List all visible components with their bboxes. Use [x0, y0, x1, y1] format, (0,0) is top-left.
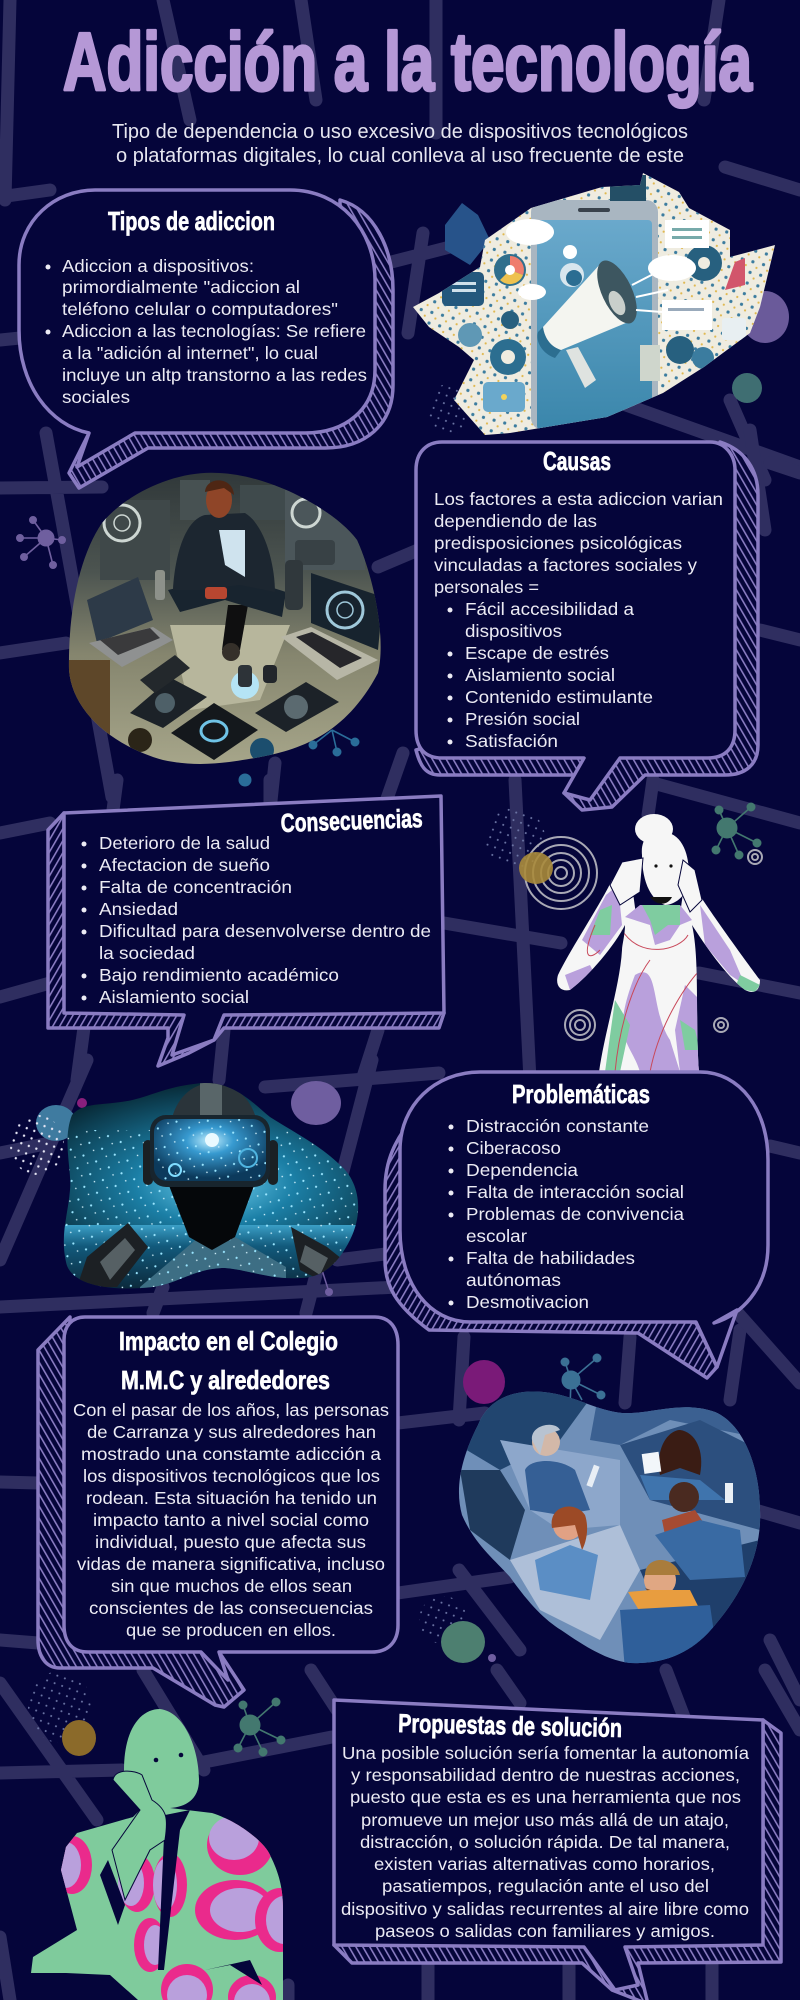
bullet list: teléfono celular o computadores" [62, 299, 338, 319]
hands [610, 858, 702, 912]
heading: Impacto en el Colegio [119, 1326, 338, 1356]
panel: problematicas [385, 1072, 768, 1378]
text and bullet list: Satisfación [465, 731, 558, 751]
bullet list: a la "adición al internet", lo cual [62, 343, 318, 363]
text and bullet list: dispositivos [465, 621, 562, 641]
text and bullet list: personales = [434, 577, 539, 597]
decor: purple and teal circles [428, 203, 789, 436]
subtitle: Tipo de dependencia o uso excesivo de dispositivos tecnológicos [112, 121, 688, 143]
subtitle [112, 121, 688, 167]
text and bullet list: Escape de estrés [465, 643, 609, 663]
megaphone [537, 255, 668, 388]
text and bullet list: Los factores a esta adiccion varian [434, 489, 723, 509]
bullet list [448, 1116, 684, 1312]
text and bullet list [434, 489, 723, 751]
man [168, 480, 286, 661]
elderly woman [532, 1432, 560, 1456]
text and bullet list: dependiendo de las [434, 511, 597, 531]
bubble shape [48, 796, 444, 1066]
body text: de Carranza y sus alrededores han [87, 1422, 376, 1442]
bubble shape [334, 1700, 781, 2000]
goggles [150, 1115, 270, 1187]
illustration: stressed woman [557, 814, 760, 1072]
heading: Tipos de adiccion [108, 206, 275, 236]
body text [73, 1400, 389, 1640]
helmet [173, 1085, 255, 1115]
text and bullet list: Contenido estimulante [465, 687, 653, 707]
woman resting [553, 1525, 578, 1540]
text and bullet list: predisposiciones psicológicas [434, 533, 682, 553]
bullet list: incluye un altp transtorno a las redes [62, 365, 367, 385]
icon: network node blue [239, 730, 359, 786]
bullet list: Dependencia [466, 1160, 578, 1180]
bullet list: Adiccion a las tecnologías: Se refiere [62, 321, 366, 341]
body text: promueve un mejor uso más allá de un atajo, [361, 1810, 729, 1830]
bubble shape [38, 1317, 398, 1707]
bullet list: Bajo rendimiento académico [99, 965, 339, 985]
icons [494, 254, 526, 286]
icon: network node green [712, 803, 761, 859]
bubble shape [416, 442, 758, 810]
bullet list: Deterioro de la salud [99, 833, 270, 853]
text and bullet list: Presión social [465, 709, 580, 729]
body text: Con el pasar de los años, las personas [73, 1400, 389, 1420]
bullet list: escolar [466, 1226, 527, 1246]
heading: Problemáticas [512, 1079, 650, 1109]
body text: individual, puesto que afecta sus [95, 1532, 366, 1552]
bullet list [46, 256, 367, 407]
panel: consecuencias [48, 796, 444, 1066]
body text: Una posible solución sería fomentar la autonomía [342, 1743, 749, 1763]
text and bullet list: Aislamiento social [465, 665, 615, 685]
bullet list: Dificultad para desenvolverse dentro de [99, 921, 431, 941]
panel: impacto [38, 1317, 398, 1707]
bullet list: autónomas [466, 1270, 561, 1290]
bullet list: Ciberacoso [466, 1138, 561, 1158]
arms and torso [557, 880, 760, 1072]
body text: que se producen en ellos. [126, 1620, 336, 1640]
man with beard [644, 1574, 676, 1590]
wall panels [100, 500, 170, 580]
illustration: person with VR headset [64, 1083, 358, 1288]
hand on cheek [112, 1771, 167, 1900]
decor: magenta and teal circles [419, 1360, 505, 1663]
text and bullet list: Fácil accesibilidad a [465, 599, 634, 619]
face [654, 864, 658, 868]
panel: tipos de adiccion [19, 190, 393, 488]
bullet list: Afectacion de sueño [99, 855, 270, 875]
bullet list: Falta de concentración [99, 877, 292, 897]
body text: rodean. Esta situación ha tenido un [86, 1488, 377, 1508]
decor: dots, spiral and brown circle [485, 808, 762, 1040]
panel: causas [416, 442, 758, 810]
bubble shape [385, 1072, 768, 1378]
bullet list: Problemas de convivencia [466, 1204, 684, 1224]
body [140, 1237, 286, 1290]
bullet list: Falta de habilidades [466, 1248, 635, 1268]
hands [77, 1223, 148, 1287]
body text: vidas de manera significativa, incluso [77, 1554, 385, 1574]
illustration: pensive green person [31, 1709, 305, 2000]
body text: puesto que esta es es una herramienta que nos [350, 1787, 741, 1807]
pink rings [61, 1818, 283, 2000]
woman with tablet [659, 1430, 701, 1475]
text and bullet list: vinculadas a factores sociales y [434, 555, 697, 575]
heading: Consecuencias [280, 803, 423, 838]
decor: circles near VR image [10, 1081, 341, 1296]
body text: impacto tanto a nivel social como [93, 1510, 369, 1530]
bullet list: Falta de interacción social [466, 1182, 684, 1202]
heading: Causas [543, 446, 611, 476]
bubble shape [19, 190, 393, 488]
body text: dispositivo y salidas recurrentes al aire libre como [341, 1899, 749, 1919]
illustration: man surrounded by devices [60, 465, 390, 770]
panel: propuestas de solucion [334, 1700, 781, 2000]
phone [531, 200, 658, 430]
tablets and devices [171, 703, 258, 760]
bullet list: Distracción constante [466, 1116, 649, 1136]
illustration: people absorbed in their phones [450, 1385, 770, 1670]
body text: existen varias alternativas como horarios, [374, 1854, 715, 1874]
icon: network node blue teal [561, 1354, 605, 1408]
head and bun [635, 814, 673, 844]
body text: y responsabilidad dentro de nuestras acciones, [351, 1765, 740, 1785]
bullet list: Aislamiento social [99, 987, 249, 1007]
bullet list: la sociedad [99, 943, 195, 963]
heading: M.M.C y alrededores [121, 1365, 330, 1395]
body text: pasatiempos, regulación ante el uso del [382, 1876, 709, 1896]
body text: paseos o salidas con familiares y amigos. [375, 1921, 715, 1941]
body text: los dispositivos tecnológicos que los [83, 1466, 380, 1486]
bullet list: primordialmente "adiccion al [62, 277, 300, 297]
heading [119, 1326, 338, 1395]
bullet list: Ansiedad [99, 899, 178, 919]
man with phone [669, 1482, 699, 1512]
body text: conscientes de las consecuencias [89, 1598, 373, 1618]
body text: distracción, o solución rápida. De tal manera, [360, 1832, 730, 1852]
illustration: phone and megaphone [410, 170, 780, 440]
body text [341, 1743, 749, 1941]
heading: Propuestas de solución [398, 1708, 622, 1743]
body text: mostrado una constamte adicción a [81, 1444, 381, 1464]
bullet list: Adiccion a dispositivos: [62, 256, 254, 276]
subtitle: o plataformas digitales, lo cual conlleva al uso frecuente de este [116, 145, 684, 167]
body text: sin que muchos de ellos sean [111, 1576, 352, 1596]
bullet list: sociales [62, 387, 130, 407]
icon: network node green bottom [234, 1698, 285, 1756]
decor: dots and brown circle [28, 1671, 96, 1756]
bullet list [82, 833, 431, 1007]
icon: network node lavender [16, 516, 66, 568]
left laptop [87, 577, 153, 643]
right laptop [311, 573, 383, 650]
bullet list: Desmotivacion [466, 1292, 589, 1312]
